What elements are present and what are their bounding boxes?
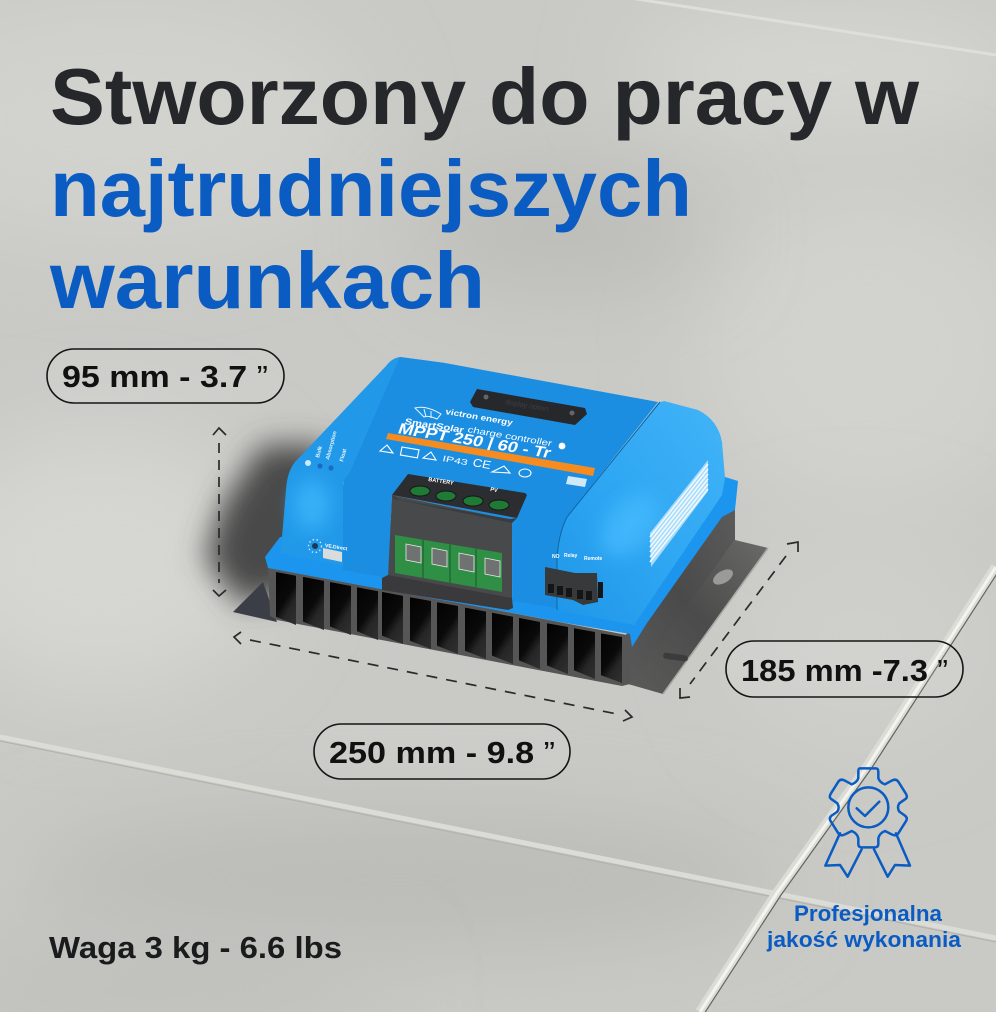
- blue enclosure: [265, 357, 738, 647]
- pill: height: [47, 349, 284, 403]
- VE.Direct port: [308, 540, 348, 562]
- front heatsink body: [268, 566, 632, 686]
- pill: height: 95 mm - 3.7 ”: [62, 359, 268, 394]
- title: najtrudniejszych: [50, 144, 692, 233]
- certification marks: [380, 445, 531, 477]
- status LEDs: Float: [339, 448, 348, 463]
- right plate: [628, 540, 768, 694]
- top and front panel: [343, 357, 658, 608]
- badge caption: jakość wykonania: [766, 927, 962, 952]
- icon: quality badge: [825, 768, 910, 877]
- right wall: [622, 500, 735, 684]
- pill: depth: 185 mm -7.3 ”: [741, 653, 948, 688]
- keyhole slot: [710, 566, 736, 588]
- seam: [557, 402, 660, 610]
- display option plate: [470, 389, 587, 425]
- flange: [265, 477, 738, 647]
- dimension arrow: depth: [680, 542, 798, 698]
- dimension arrow: width: [234, 632, 632, 721]
- device cast shadow: [205, 445, 330, 604]
- VE.Direct port: VE.Direct: [325, 543, 348, 552]
- signal connector: Remote: [584, 556, 603, 562]
- logo and product label: charge controller: [466, 424, 553, 448]
- title: [49, 52, 920, 325]
- signal connector: [545, 553, 603, 605]
- signal connector: NO: [552, 554, 560, 560]
- orange stripe: [386, 433, 595, 476]
- weight text: Waga 3 kg - 6.6 lbs: [49, 930, 342, 965]
- dimension arrow: height: [213, 428, 226, 596]
- right lobe: [557, 401, 725, 625]
- heatsink fins: [276, 572, 622, 683]
- pill: width: [314, 724, 570, 779]
- title: Stworzony do pracy w: [50, 52, 920, 141]
- badge caption: [766, 901, 962, 952]
- power terminal block: [382, 474, 527, 610]
- white hatched label: [650, 460, 708, 567]
- signal connector: Relay: [564, 553, 578, 559]
- status LEDs: Absorption: [325, 430, 339, 461]
- logo and product label: IP43: [442, 454, 469, 467]
- mounting plate and heatsink: [233, 500, 768, 694]
- power terminal block: BATTERY: [428, 477, 454, 487]
- left plate: [233, 582, 277, 622]
- QR code: [566, 476, 587, 487]
- power terminal block: PV: [490, 487, 498, 494]
- left lobe: [280, 357, 445, 566]
- terminal lip: [382, 575, 513, 610]
- status LEDs: Bulk: [315, 445, 324, 459]
- logo and product label: MPPT 250 | 60 - Tr: [396, 420, 554, 462]
- title: warunkach: [49, 236, 485, 325]
- badge caption: Profesjonalna: [794, 901, 943, 926]
- logo and product label: victron energy: [445, 407, 514, 427]
- status LEDs: [305, 430, 348, 471]
- brand mark: [415, 407, 441, 419]
- logo and product label: SmartSolar: [403, 416, 466, 435]
- pill: depth: [726, 641, 963, 697]
- pill: width: 250 mm - 9.8 ”: [329, 735, 555, 770]
- bolt: [663, 652, 688, 662]
- logo and product label: [380, 407, 595, 487]
- product: solar charge controller: [233, 357, 768, 694]
- logo and product label: CE: [471, 457, 493, 472]
- display option plate: display option: [505, 398, 549, 413]
